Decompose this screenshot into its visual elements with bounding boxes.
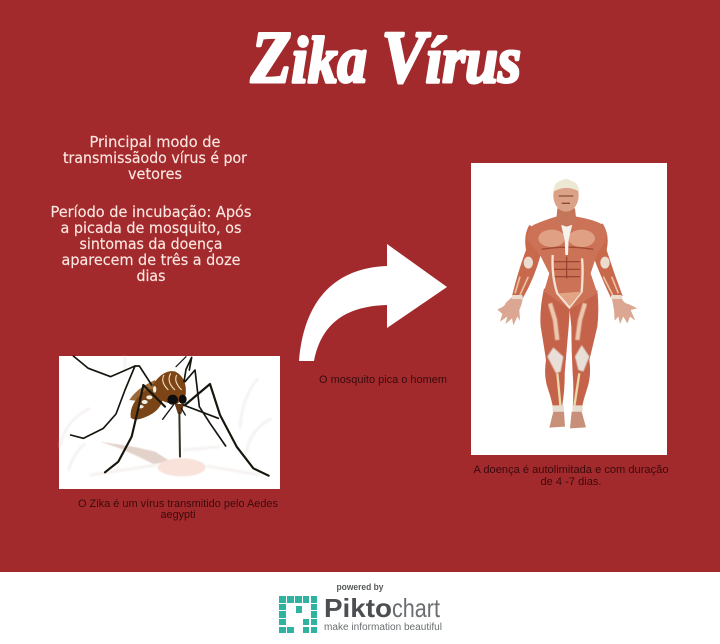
- footer: [0, 572, 720, 644]
- Piktochart wordmark: [324, 593, 441, 623]
- tagline: make information beautiful: [324, 622, 442, 633]
- text block: incubation: [50, 203, 252, 285]
- text block: incubation: Período de incubação: Após: [50, 203, 252, 221]
- text block: incubation: a picada de mosquito, os: [60, 219, 242, 237]
- forearm tendons: [512, 257, 622, 299]
- human body caption: [474, 464, 668, 488]
- powered by label: powered by: [336, 582, 384, 592]
- bite spot: [158, 458, 206, 476]
- legs: [71, 356, 269, 476]
- human body image panel: [471, 163, 667, 455]
- head: [553, 180, 579, 212]
- head: [167, 395, 178, 405]
- Piktochart wordmark: chart: [392, 593, 441, 623]
- text block: incubation: aparecem de três a doze: [62, 251, 240, 269]
- body: [71, 356, 269, 476]
- icon: Piktochart logo: [279, 596, 317, 633]
- human body caption: de 4 -7 dias.: [540, 476, 602, 488]
- text block: incubation: dias: [136, 267, 166, 285]
- knees: [547, 347, 563, 373]
- feet: [549, 412, 565, 428]
- mosquito image panel: [59, 356, 280, 489]
- hands: [497, 297, 523, 325]
- text block: transmission: transmissãodo vírus é por: [63, 149, 248, 167]
- Piktochart wordmark: Pikto: [324, 593, 392, 623]
- text block: transmission: vetores: [128, 165, 182, 183]
- arms: [512, 225, 544, 299]
- proboscis: [176, 412, 183, 457]
- arrow caption: O mosquito pica o homem: [319, 374, 447, 386]
- skin folds: [60, 357, 272, 475]
- human body caption: A doença é autolimitada e com duração: [474, 464, 668, 476]
- mosquito caption: [78, 498, 278, 521]
- arrow: [299, 244, 447, 361]
- mosquito caption: aegypti: [160, 509, 196, 521]
- shadow: [100, 442, 171, 464]
- text block: incubation: sintomas da doença: [80, 235, 222, 253]
- title: Zika Vírus: [250, 17, 521, 99]
- neck: [556, 208, 577, 227]
- tendons: [561, 224, 572, 255]
- torso: [527, 217, 606, 309]
- shin tendons: [557, 373, 579, 408]
- thigh highlights: [550, 303, 585, 340]
- text block: transmission: Principal modo de: [90, 133, 220, 151]
- text block: transmission: [63, 133, 248, 183]
- mosquito caption: O Zika é um vírus transmitido pelo Aedes: [78, 498, 278, 510]
- chest: [538, 230, 565, 247]
- legs: [540, 288, 570, 409]
- ankles: [553, 399, 583, 417]
